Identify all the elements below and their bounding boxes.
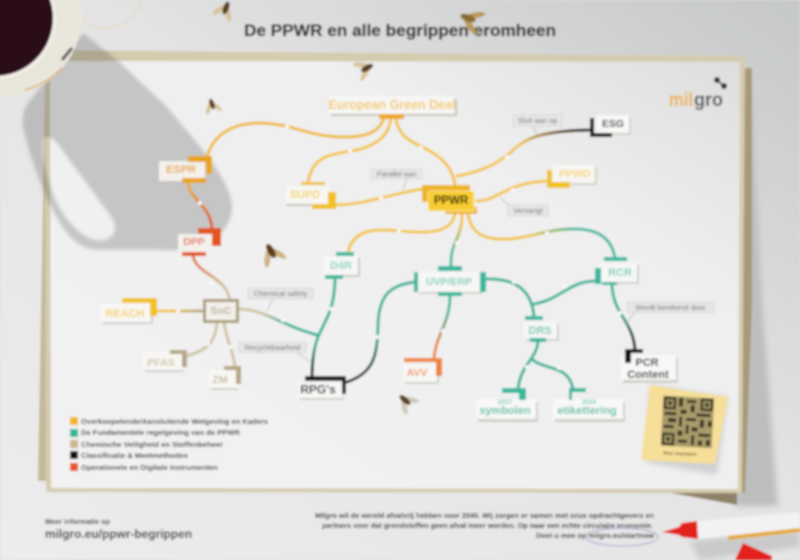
node: PPWR: PPWR bbox=[434, 195, 469, 207]
node: RCR bbox=[595, 257, 639, 285]
node: DPP: DPP bbox=[183, 236, 205, 248]
node: European Green Deal: European Green Deal bbox=[328, 98, 456, 112]
legend: De Fundamentele regelgeving van de PPWR bbox=[81, 428, 241, 437]
connections bbox=[157, 118, 635, 390]
node: symbolen 2027: 2027 bbox=[498, 399, 513, 406]
footer: mission statement: Milgro wil de wereld afvalvrij hebben voor 2040. Wij zorgen er samen met onze opdrachtgevers en bbox=[315, 513, 654, 520]
coffee ring stain bbox=[71, 0, 141, 28]
post-it with QR code bbox=[641, 385, 728, 475]
marker cap bbox=[735, 543, 772, 560]
node: RCR: RCR bbox=[608, 267, 632, 279]
node: PCR Content: PCR bbox=[635, 357, 659, 369]
post-it with QR code: Meer begrippen bbox=[663, 450, 697, 457]
legend: Chemische Veiligheid en Stoffenbeheer bbox=[81, 440, 223, 449]
legend: Classificatie & Meetmethodes bbox=[81, 451, 188, 460]
mug bbox=[0, 0, 82, 97]
legend: Overkoepelende/Aansluitende Wetgeving en Kaders bbox=[81, 417, 268, 426]
tag: Sluit aan op: Sluit aan op bbox=[518, 116, 557, 125]
node: etikettering 2028: 2028 bbox=[582, 399, 597, 406]
node: AVV bbox=[403, 358, 442, 384]
legend bbox=[70, 417, 268, 472]
node: REACH: REACH bbox=[105, 308, 145, 320]
tag: Chemical safety bbox=[248, 288, 313, 311]
footer: more info bbox=[45, 519, 192, 541]
line markers bbox=[176, 125, 622, 370]
footer: mission statement: partners voor dat grondstoffen geen afval meer worden. Op naar een echte circulaire economie. bbox=[322, 523, 653, 530]
node: DPP bbox=[178, 228, 221, 256]
tag: Parallel aan bbox=[371, 169, 422, 190]
node: D4R bbox=[324, 252, 360, 279]
bee bbox=[455, 3, 487, 38]
tag: Wordt berekend door bbox=[626, 302, 714, 324]
node: UVP/ERP bbox=[414, 266, 486, 296]
node: PFAS bbox=[143, 350, 187, 372]
map sheet bbox=[45, 50, 745, 493]
node: ESG: ESG bbox=[602, 118, 624, 130]
tag: Sluit aan op bbox=[513, 115, 562, 135]
bee bbox=[200, 96, 224, 118]
footer: more info: milgro.eu/ppwr-begrippen bbox=[45, 527, 192, 541]
marker pen bbox=[662, 512, 800, 560]
logo: milgro: mil bbox=[669, 90, 693, 111]
tag: Vervangt bbox=[500, 197, 548, 216]
node: PPWD: PPWD bbox=[559, 168, 591, 180]
bee bbox=[254, 238, 289, 272]
node: PPWD bbox=[547, 165, 597, 188]
node: ZM: ZM bbox=[212, 374, 228, 386]
mug shadow bbox=[23, 33, 232, 250]
node: RPG's: RPG's bbox=[300, 382, 336, 396]
tag: Recyclebaarheid bbox=[239, 342, 310, 362]
tag: Wordt berekend door: Wordt berekend door bbox=[635, 303, 706, 312]
node: PCR Content bbox=[621, 349, 678, 383]
node: symbolen 2027: symbolen bbox=[479, 405, 531, 417]
node: DRS bbox=[524, 316, 559, 342]
back sheet bbox=[38, 68, 752, 505]
node: symbolen 2027 bbox=[476, 388, 538, 422]
footer: mission statement: Doet u mee op milgro.eu/startnow bbox=[536, 533, 655, 540]
paper shadow right bbox=[735, 70, 778, 506]
bee bbox=[392, 388, 422, 418]
node: RPG's bbox=[298, 376, 346, 400]
node: SUPD bbox=[286, 182, 336, 209]
node: SUPD: SUPD bbox=[290, 189, 320, 201]
node: SoC: SoC bbox=[210, 305, 232, 317]
node: European Green Deal bbox=[328, 96, 457, 119]
node: PFAS: PFAS bbox=[147, 357, 175, 369]
node: etikettering 2028 bbox=[553, 388, 625, 422]
node: DRS: DRS bbox=[528, 325, 552, 337]
bee bbox=[210, 0, 238, 24]
legend: Operationele en Digitale Instrumenten bbox=[81, 463, 218, 472]
footer: more info: Meer informatie op bbox=[45, 519, 110, 526]
node: PPWR bbox=[422, 185, 477, 214]
logo: milgro: gro bbox=[694, 90, 723, 111]
node: PCR Content: Content bbox=[627, 369, 669, 381]
tag: Parallel aan: Parallel aan bbox=[377, 170, 416, 178]
tag: Chemical safety: Chemical safety bbox=[254, 289, 307, 298]
node: D4R: D4R bbox=[330, 260, 352, 272]
node: ESG bbox=[590, 115, 631, 137]
pen circle around link bbox=[586, 528, 658, 546]
node: ZM bbox=[209, 366, 241, 390]
footer: mission statement bbox=[315, 513, 655, 540]
node: REACH bbox=[101, 298, 157, 324]
node: etikettering 2028: etikettering bbox=[557, 405, 617, 417]
node: ESPR: ESPR bbox=[166, 164, 196, 176]
tag: Vervangt: Vervangt bbox=[513, 206, 544, 215]
tag: Recyclebaarheid: Recyclebaarheid bbox=[245, 343, 300, 352]
node: AVV: AVV bbox=[407, 367, 427, 379]
node: UVP/ERP: UVP/ERP bbox=[426, 276, 472, 288]
node: ESPR bbox=[159, 156, 212, 183]
title: De PPWR en alle begrippen eromheen bbox=[244, 22, 556, 40]
bee bbox=[350, 54, 378, 83]
node: SoC bbox=[203, 299, 239, 323]
logo: milgro bbox=[669, 77, 727, 111]
